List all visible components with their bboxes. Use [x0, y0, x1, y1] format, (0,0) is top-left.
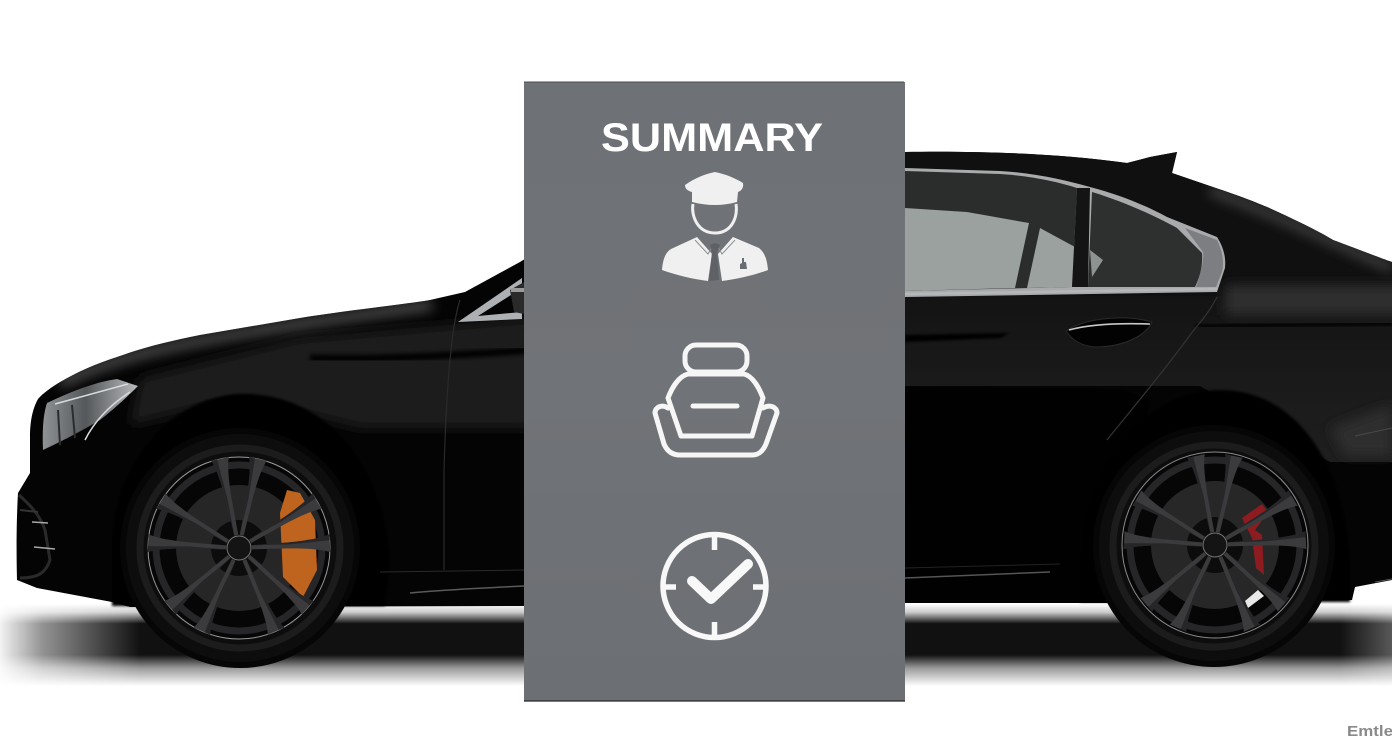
chauffeur tie — [709, 243, 720, 281]
seat back — [668, 374, 763, 436]
rear quarter glass — [1088, 192, 1202, 287]
spokes — [1124, 454, 1306, 632]
tire — [1096, 428, 1332, 664]
rear wheel arch — [1080, 390, 1350, 602]
brake disc — [176, 485, 302, 611]
rear wheel — [1096, 428, 1332, 664]
spokes — [148, 457, 330, 635]
window reflection — [905, 208, 1029, 291]
rim — [1122, 452, 1308, 638]
clock face — [663, 534, 766, 638]
headlight — [43, 379, 138, 450]
road gap seen through wheel — [1245, 590, 1264, 608]
body paint highlights — [60, 150, 1392, 605]
car body — [17, 152, 1392, 607]
chauffeur collar — [695, 240, 735, 254]
side mirror and front window trim — [458, 278, 524, 322]
seat line — [693, 404, 737, 408]
door seam — [444, 300, 460, 570]
heading: SUMMARY — [601, 116, 823, 160]
brake disc — [1151, 481, 1279, 609]
chauffeur badge — [740, 258, 747, 269]
icon: clock with check — [663, 534, 766, 638]
seat arm rest — [655, 406, 777, 455]
hub — [1203, 533, 1227, 557]
icon: car seat — [655, 345, 777, 455]
rear side windows — [905, 168, 1225, 297]
window sill — [905, 289, 1217, 294]
side window glass — [905, 171, 1077, 291]
watermark text: Emtle — [1347, 723, 1392, 740]
window chrome trim — [905, 168, 1225, 297]
seat headrest — [685, 345, 747, 372]
door handle — [1066, 318, 1152, 347]
rim — [148, 457, 330, 639]
chauffeur shoulders — [662, 237, 768, 281]
chauffeur face outline — [693, 204, 736, 233]
clock ticks — [664, 537, 765, 636]
hub — [227, 536, 251, 560]
check mark — [692, 564, 748, 599]
front wheel arch — [112, 394, 390, 606]
car — [17, 150, 1392, 665]
chauffeur cap — [685, 172, 743, 205]
tire — [123, 431, 357, 665]
panel: summary — [524, 82, 905, 701]
panel background — [524, 82, 905, 701]
ground shadow — [0, 600, 1392, 690]
front bumper grille — [19, 495, 55, 578]
orange brake caliper — [280, 490, 317, 597]
icon: chauffeur — [662, 172, 768, 281]
window pillar — [1072, 188, 1090, 287]
front wheel — [123, 431, 357, 665]
red brake caliper — [1242, 504, 1268, 575]
